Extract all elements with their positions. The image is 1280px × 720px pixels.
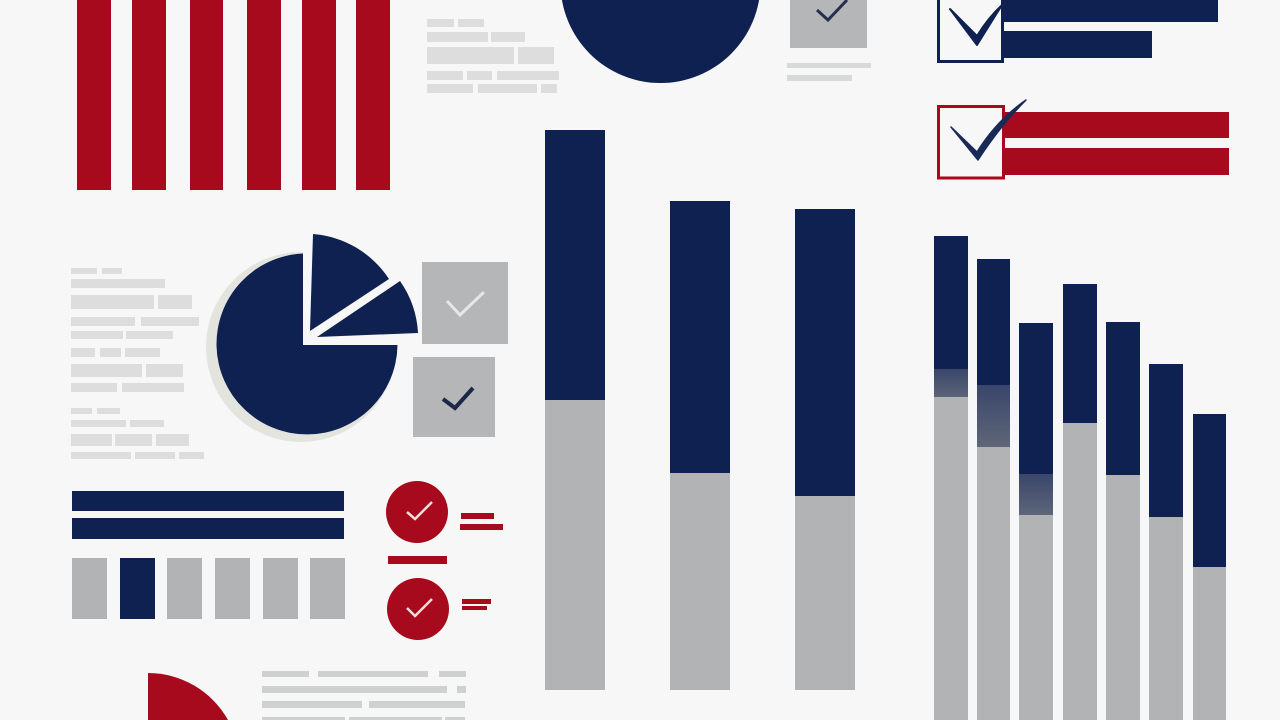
navy circle cropped at top [560, 0, 760, 83]
pie chart with exploded wedges [206, 234, 418, 442]
placeholder text block: top centre [427, 19, 559, 93]
navy checklist item [938, 0, 1218, 62]
red divider [388, 556, 447, 564]
red checklist item [938, 100, 1229, 178]
red vertical stripes [77, 0, 390, 190]
red check badge: lower [387, 578, 491, 640]
grey box with white check [422, 262, 508, 344]
placeholder text block: left [71, 268, 204, 459]
tall bar chart: centre [545, 130, 855, 690]
row of grey and navy tiles [72, 558, 345, 619]
red quarter pie cropped at bottom [148, 673, 228, 720]
placeholder text block: bottom [262, 671, 466, 720]
stacked bar chart: right [934, 236, 1226, 720]
red check badge: upper [386, 481, 503, 543]
grey box with navy check [413, 357, 495, 437]
grey check box with caption lines [787, 0, 871, 81]
navy horizontal bars [72, 491, 344, 539]
